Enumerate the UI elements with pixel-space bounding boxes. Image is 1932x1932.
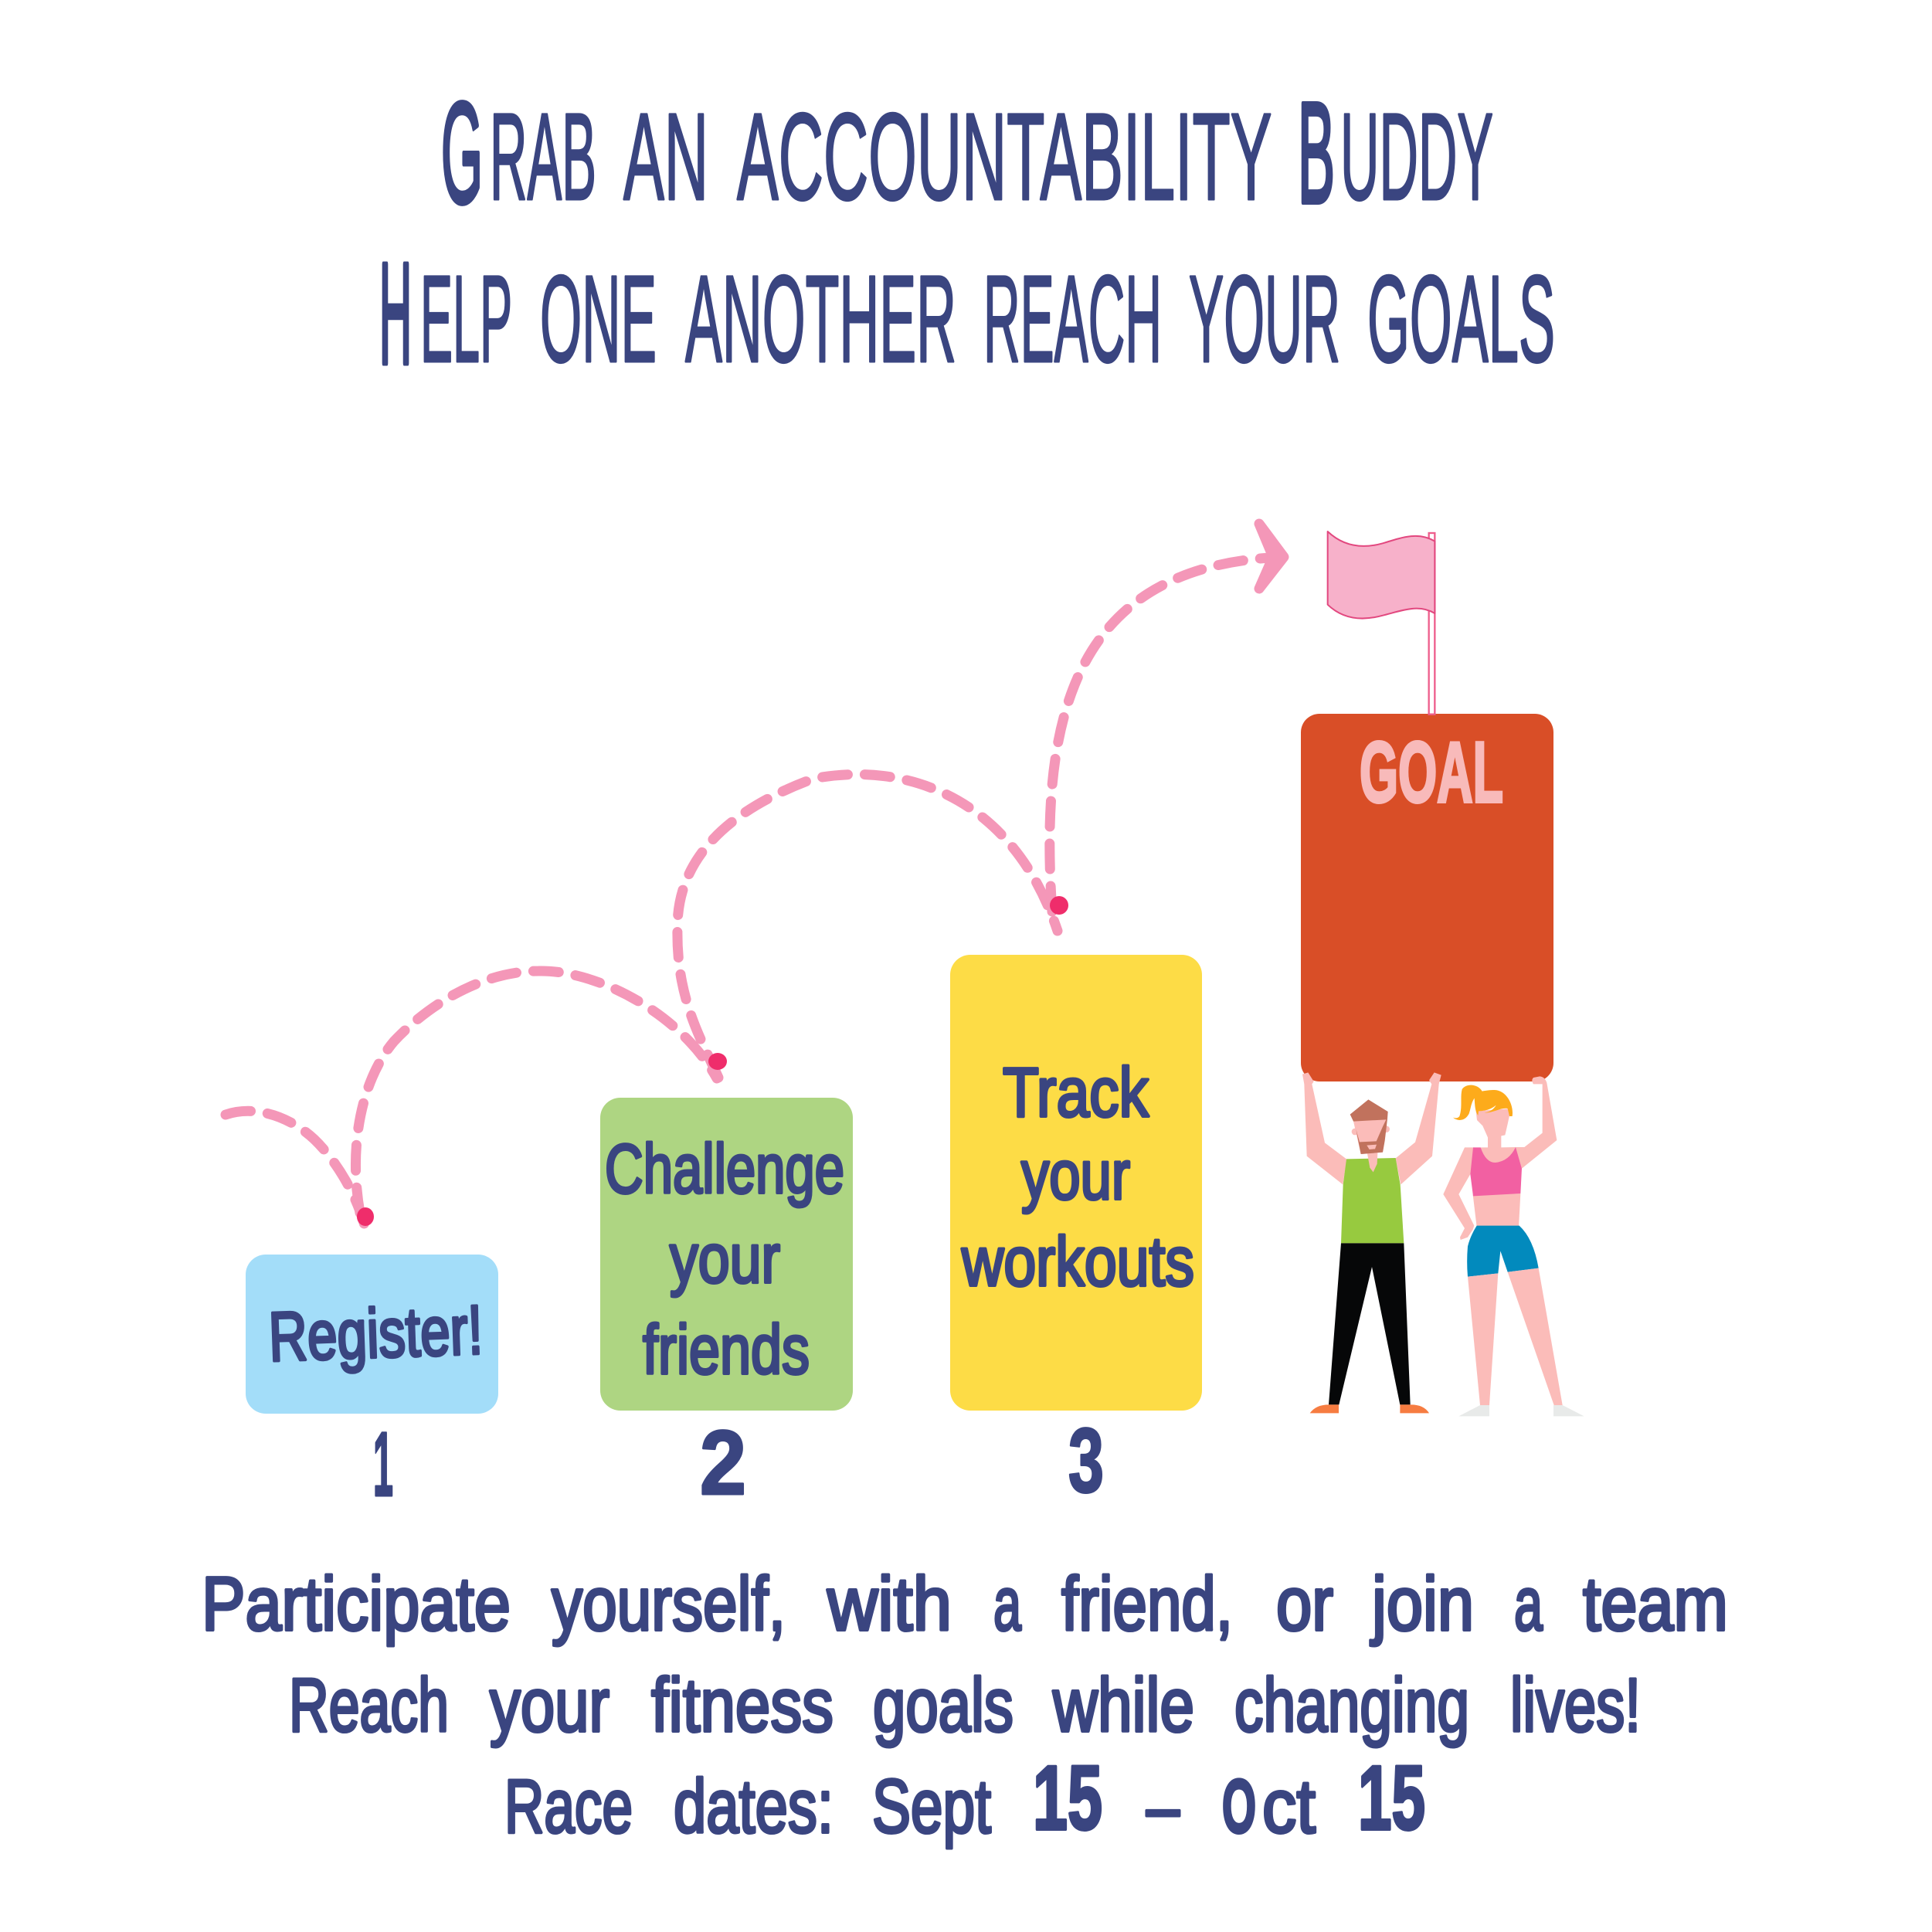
footer line 3: O <box>1222 1764 1256 1849</box>
footer line 1: a <box>1514 1561 1543 1646</box>
panel: step 2 challenge your friends: your <box>670 1221 780 1298</box>
arrow: chevron head <box>1259 524 1284 589</box>
arrow: dashed jump path to step 2 <box>355 971 717 1213</box>
footer line 3: Race <box>504 1764 633 1849</box>
text: 1 <box>373 1414 393 1516</box>
panel: goal <box>1301 714 1553 1081</box>
icon: flag <box>1328 531 1435 715</box>
footer line 1: or <box>1276 1561 1333 1646</box>
title line 1: B <box>1298 73 1335 233</box>
marker dot 1 <box>357 1207 374 1226</box>
title line 1: ACCOUNTABILITY <box>737 87 1271 226</box>
footer line 2: changing <box>1234 1662 1469 1747</box>
title line 2: ANOTHER <box>685 250 956 388</box>
title line 2: ELP <box>420 250 511 388</box>
icon: man lifting goal <box>1302 1072 1441 1413</box>
arrow: dashed jump path to step 1 <box>226 1111 365 1228</box>
footer line 3: 15 <box>1358 1747 1425 1849</box>
panel: step 2 challenge your friends: Challenge <box>605 1131 844 1208</box>
footer line 3: dates: <box>674 1764 834 1849</box>
title line 2: YOUR <box>1189 250 1340 388</box>
footer line 2: lives! <box>1510 1662 1641 1747</box>
panel: step 3 track your workouts: your <box>1021 1137 1130 1214</box>
text: GOALS <box>1367 250 1555 388</box>
footer line 3: Sept <box>872 1764 991 1849</box>
footer line 1: team <box>1583 1561 1728 1646</box>
panel: step 3 track your workouts: Track <box>1003 1054 1149 1132</box>
panel: step 3 track your workouts: workouts <box>961 1224 1194 1301</box>
title <box>379 73 1555 394</box>
panel: step 1 register <box>246 1255 498 1414</box>
footer line 2: while <box>1052 1662 1194 1747</box>
marker dot 3 <box>1050 896 1068 915</box>
text block: footer message <box>202 1561 1728 1849</box>
icon: woman lifting goal <box>1443 1076 1584 1416</box>
panel: step 3 track your workouts <box>950 955 1202 1411</box>
number 3: 3 <box>1068 1410 1104 1512</box>
footer line 1: yourself, <box>552 1561 786 1646</box>
panel: goal: GOAL <box>1360 725 1503 820</box>
footer line 1: join <box>1370 1561 1474 1646</box>
panel: step 2 challenge your friends: friends <box>643 1312 810 1389</box>
footer line 1: a <box>993 1561 1021 1646</box>
title line 1: AN <box>623 87 708 226</box>
footer line 3: – <box>1146 1764 1180 1849</box>
marker dot 2 <box>708 1053 727 1070</box>
title line 1: RAB <box>490 87 596 226</box>
footer line 2: fitness <box>651 1662 834 1747</box>
title line 2: ONE <box>540 250 657 388</box>
title line 1: G <box>441 73 483 233</box>
footer line 1: friend, <box>1061 1561 1233 1646</box>
title: UDDY <box>1340 87 1493 226</box>
footer line 1: Participate <box>202 1561 511 1646</box>
footer line 3: ct <box>1262 1764 1316 1849</box>
footer line 3: 15 <box>1033 1747 1102 1849</box>
footer line 2: your <box>490 1662 609 1747</box>
arrow: dashed jump path to step 3 <box>677 774 1058 1078</box>
footer line 2: goals <box>873 1662 1014 1747</box>
footer line 2: Reach <box>289 1662 449 1747</box>
panel: step 1 register: Register! <box>267 1292 484 1377</box>
panel: step 2 challenge your friends <box>600 1098 853 1411</box>
arrow: dashed jump path to goal <box>1050 558 1269 912</box>
number 2: 2 <box>700 1412 746 1514</box>
title line 2: H <box>379 234 412 394</box>
title line 2: REACH <box>983 250 1162 388</box>
footer line 1: with <box>827 1561 952 1646</box>
